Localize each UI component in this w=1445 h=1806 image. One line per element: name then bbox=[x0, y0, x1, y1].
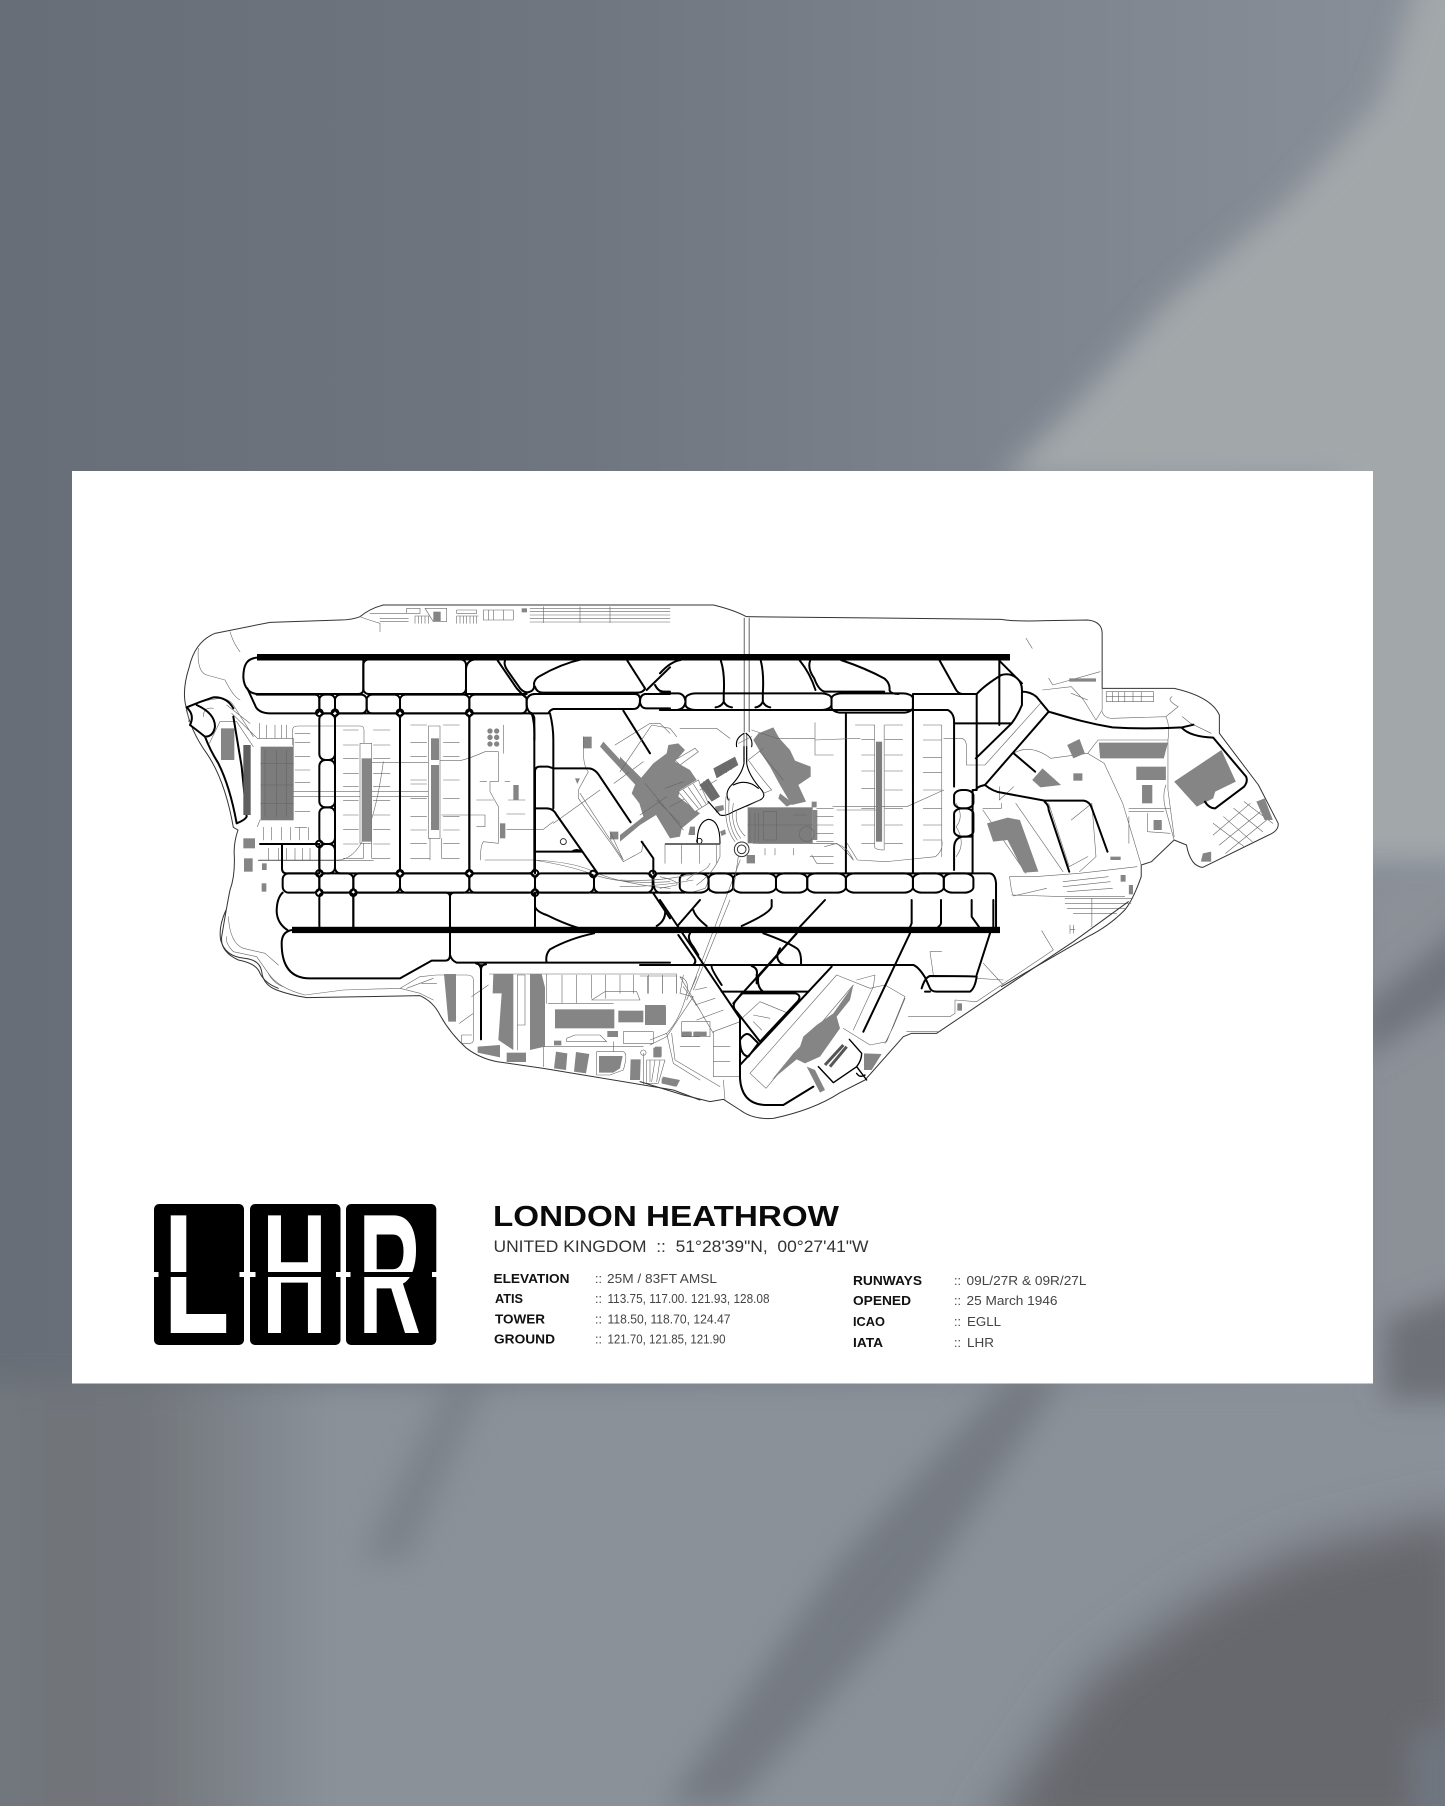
west stands and road lines bbox=[258, 723, 670, 888]
data table right column: RUNWAYS bbox=[853, 1274, 922, 1288]
data table left column: TOWER bbox=[495, 1312, 545, 1326]
east taxiways bbox=[660, 660, 1247, 927]
poster sheet bbox=[72, 471, 1373, 1384]
east hangars bbox=[876, 739, 1236, 894]
data table left column: 118.50, 118.70, 124.47 bbox=[608, 1312, 731, 1326]
airport map bbox=[184, 605, 1278, 1119]
title: LONDON HEATHROW bbox=[493, 1201, 840, 1233]
data table right column: :: bbox=[954, 1294, 961, 1308]
south-west lines bbox=[228, 917, 700, 1085]
data table left column bbox=[494, 1272, 770, 1346]
west outline bbox=[184, 605, 670, 988]
terminal approach road bbox=[744, 618, 749, 732]
data table right column: 09L/27R & 09R/27L bbox=[966, 1274, 1087, 1288]
tile R: R bbox=[358, 1178, 421, 1370]
runway 09L/27R bbox=[257, 654, 1010, 660]
data table left column: ELEVATION bbox=[494, 1272, 570, 1286]
data table right column: :: bbox=[954, 1274, 961, 1288]
south-west cargo area bbox=[220, 910, 700, 1100]
data table left column: :: bbox=[595, 1292, 602, 1306]
west terminals and hangars bbox=[221, 728, 645, 892]
central terminal west outlines bbox=[553, 723, 670, 862]
data table left column: ATIS bbox=[495, 1292, 523, 1306]
map west half: taxiways, buildings and outline bbox=[184, 605, 670, 988]
tile R bbox=[346, 1178, 436, 1370]
data table right column: IATA bbox=[853, 1336, 883, 1350]
map east half: taxiways, buildings and outline bbox=[660, 605, 1278, 990]
data table left column: 113.75, 117.00. 121.93, 128.08 bbox=[608, 1292, 770, 1306]
data table left column: :: bbox=[595, 1272, 602, 1286]
data table right column: ICAO bbox=[853, 1315, 885, 1329]
terminal 2 and 1 mass bbox=[620, 743, 708, 842]
south-west buildings bbox=[444, 974, 700, 1087]
data table left column: 121.70, 121.85, 121.90 bbox=[608, 1332, 726, 1346]
west taxiways bbox=[243, 658, 670, 978]
data table right column bbox=[853, 1274, 1087, 1350]
cargo taxiway stub bbox=[476, 963, 486, 1039]
south-west outline bbox=[220, 910, 700, 1100]
tile H: H bbox=[262, 1178, 327, 1369]
north car parks bbox=[370, 607, 670, 623]
east outline bbox=[660, 605, 1278, 987]
south-east taxiways bbox=[640, 900, 993, 1105]
tile L: L bbox=[164, 1180, 230, 1370]
data table right column: EGLL bbox=[967, 1315, 1001, 1329]
data table left column: 25M / 83FT AMSL bbox=[607, 1272, 717, 1286]
data table right column: LHR bbox=[967, 1336, 994, 1350]
south-east terminal buildings bbox=[653, 985, 962, 1093]
east stands and lines bbox=[660, 725, 961, 990]
junction circles bbox=[316, 709, 656, 896]
split line and notches bbox=[154, 1272, 437, 1277]
data table right column: :: bbox=[954, 1336, 961, 1350]
parking hatching bbox=[1063, 692, 1273, 927]
south-east lines bbox=[640, 900, 1075, 1100]
subtitle: country and coordinates: UNITED KINGDOM :: 51°28'39"N, 00°27'41"W bbox=[494, 1238, 869, 1256]
data table left column: GROUND bbox=[494, 1332, 555, 1346]
central road loops bbox=[620, 723, 860, 890]
data table right column: OPENED bbox=[853, 1294, 911, 1308]
multi-storey car parks bbox=[699, 757, 738, 802]
data table right column: :: bbox=[954, 1315, 961, 1329]
data table right column: 25 March 1946 bbox=[966, 1294, 1058, 1308]
south-east terminal 4 area bbox=[640, 900, 1128, 1119]
terminal 3 mass bbox=[753, 727, 811, 805]
south-east outline bbox=[640, 902, 1128, 1119]
central terminal complex bbox=[620, 723, 860, 890]
data table left column: :: bbox=[595, 1332, 602, 1346]
terminal 3 apron block bbox=[688, 793, 833, 863]
LHR flip-board logo bbox=[154, 1178, 437, 1370]
data table left column: :: bbox=[595, 1312, 602, 1326]
runway 09R/27L bbox=[292, 927, 1000, 933]
